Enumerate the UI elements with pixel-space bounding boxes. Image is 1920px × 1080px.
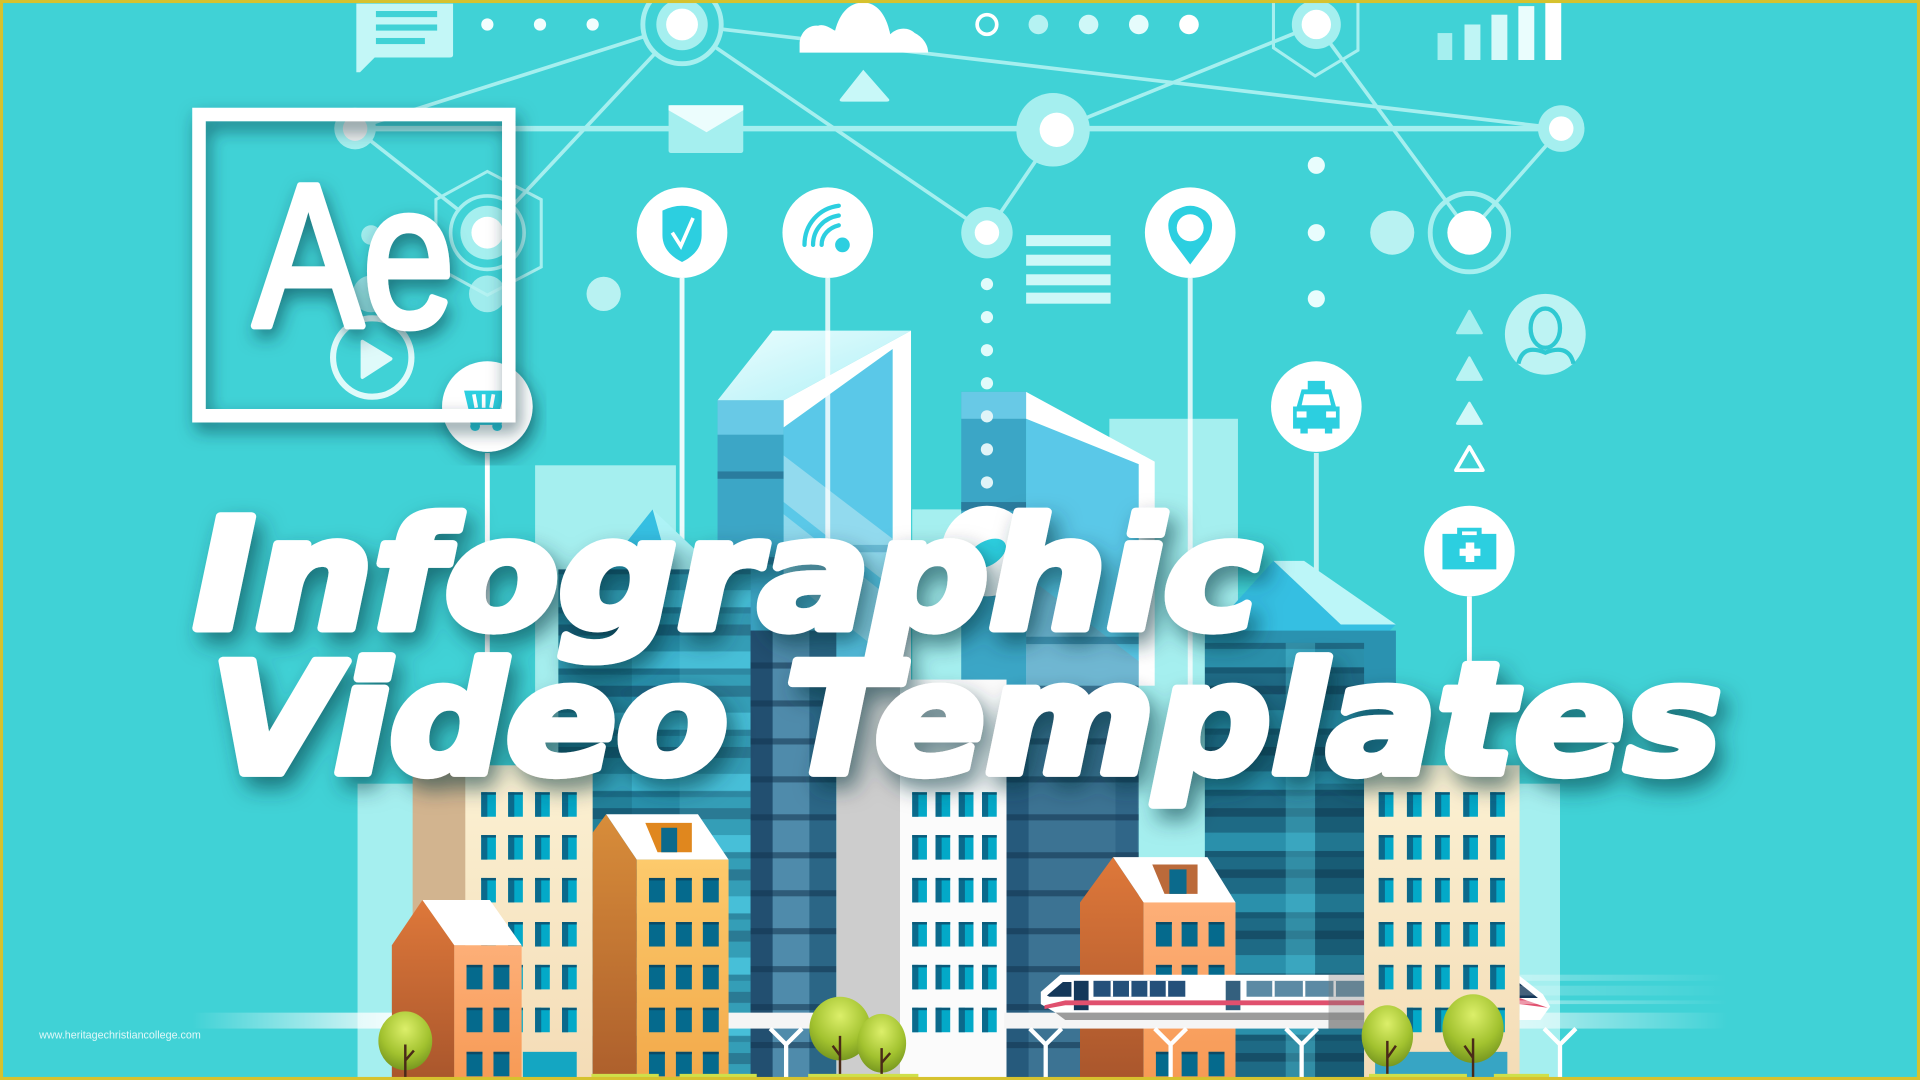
building: right striped block [1205,561,1396,1080]
monorail train [1041,975,1550,1020]
triangles column [1456,311,1483,470]
house: yellow [593,814,729,1080]
node hexagon [451,196,524,269]
node middle [961,207,1013,258]
logo frame [192,108,516,422]
dotted line [981,278,993,389]
node left top [334,108,376,149]
tree one [378,1011,432,1080]
hexagon top right [1273,0,1358,76]
icon circle: shield [637,187,727,278]
icon: bar chart [1438,2,1561,60]
icon: chat bubble [356,4,453,72]
house: orange left [392,900,522,1080]
node ring right [1430,193,1509,272]
title line one: Infographic [193,487,1261,665]
pale circles [353,211,1414,312]
tree two [809,997,871,1080]
stems [487,278,1469,857]
building: dark tower [751,631,836,1080]
icon circle: first aid [1424,506,1515,596]
icon: play ring [333,318,411,397]
icon circle: cart [442,361,533,452]
icon circle: leaf [942,506,1032,596]
watermark: www.heritagechristiancollege.com [38,1029,201,1041]
back pale buildings [358,419,1560,1080]
building: beige left [413,765,593,1080]
network lines and nodes [334,0,1584,295]
monorail track [192,1013,1728,1080]
dots column [1308,157,1325,307]
hexagon left [436,171,541,295]
icon circle: wifi [782,187,873,278]
icon: list bars [1026,235,1111,304]
building: teal striped block [558,509,751,1080]
icon: triangle [840,70,889,102]
node top right [1292,0,1341,49]
icon circle: taxi [1271,361,1362,452]
node top centre [643,0,721,64]
tree three [857,1014,906,1080]
dots top left [481,18,599,31]
icon: cloud [800,2,928,53]
icon: envelope [669,105,743,153]
title [193,487,1722,810]
building: beige right [1364,765,1520,1080]
tree five [1442,994,1504,1080]
ground strips [591,1074,1549,1080]
node right [1538,105,1584,152]
building: tower two [961,392,1155,808]
tree four [1362,1005,1413,1080]
node large [1016,93,1090,167]
logo text Ae: Ae [253,143,454,370]
building: tower one [718,331,911,771]
house: orange right [1080,857,1236,1080]
motion stripes [1520,975,1728,1004]
icon circle: location pin [1145,187,1236,278]
building: blue grey tower [1007,686,1205,1080]
dots row top [977,15,1199,34]
title line two: Video Templates [211,632,1722,810]
dotted line over tower [981,410,993,489]
building: white tower [836,680,1007,1080]
icon: person [1505,294,1586,375]
